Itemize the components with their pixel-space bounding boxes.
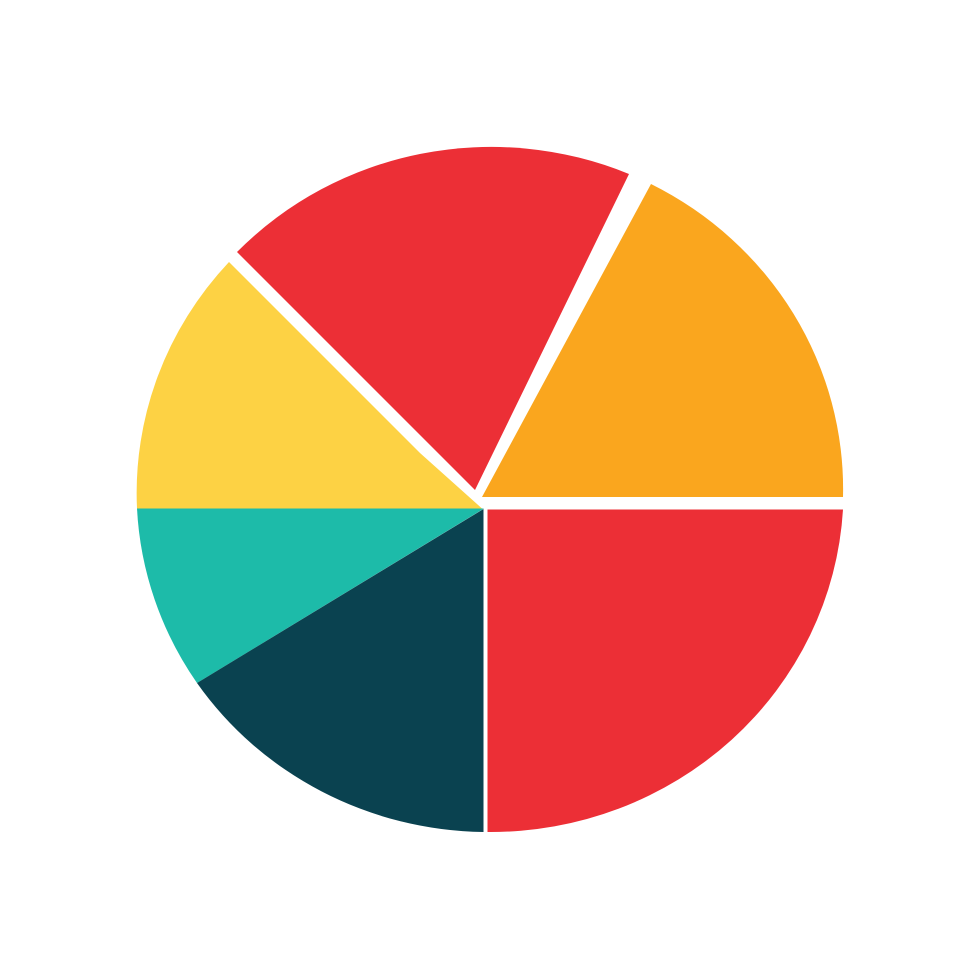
slice: orange — [482, 184, 843, 497]
slice: yellow — [137, 262, 482, 508]
slice: red top — [237, 147, 629, 490]
slice: dark navy — [197, 509, 484, 832]
slice: teal — [137, 508, 484, 683]
slice: red bottom — [488, 510, 843, 832]
